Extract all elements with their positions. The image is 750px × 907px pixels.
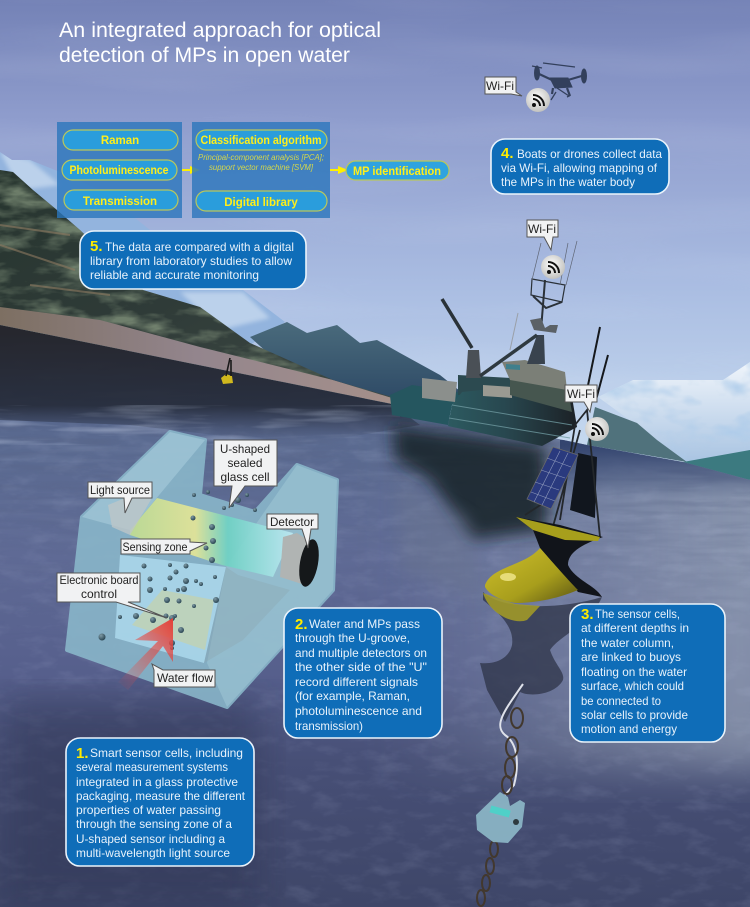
callout 3 (570, 604, 725, 742)
label: Electronic board control (57, 573, 167, 618)
pill: MP identification: MP identification (353, 166, 441, 178)
callout 5 (80, 231, 306, 289)
label: Wi-Fi drone (485, 77, 522, 96)
research boat (390, 241, 577, 446)
callout 1: 1. (76, 745, 89, 762)
boat: deck block (458, 375, 512, 395)
boat: main hull (448, 387, 577, 446)
callout 1: multi-wavelength light source (76, 846, 230, 860)
buoy: frame (525, 410, 600, 537)
distant buoy on the water (221, 358, 233, 384)
boat: wheelhouse upper (502, 360, 567, 390)
label: Electronic board control: Electronic board (60, 573, 138, 587)
pill: Digital library: Digital library (224, 197, 298, 209)
callout 3: be connected to (581, 694, 661, 708)
buoy: solar panel (527, 447, 578, 509)
background: left mountain and shore (0, 165, 400, 405)
cell: glass tube (130, 498, 293, 577)
callout 2: transmission) (295, 719, 363, 733)
boat: crane stay (480, 335, 537, 376)
callout 3: The sensor cells, (595, 607, 680, 621)
buoy: yellow float (485, 548, 578, 603)
boat: mast base (527, 335, 545, 364)
cell: water flow arrow (118, 618, 173, 690)
buoy: dark back panel (570, 453, 597, 518)
boat: radar frame (531, 241, 577, 330)
buoy (480, 327, 608, 722)
callout 2: (for example, Raman, (295, 689, 410, 703)
callout 2: record different signals (295, 675, 418, 689)
buoy: masts (585, 327, 608, 400)
callout 4: 4. (501, 145, 514, 162)
pill: Classification algorithm: Classification algorithm (200, 135, 322, 147)
label: Water flow (152, 664, 215, 687)
chain links (477, 708, 523, 906)
cell: outer translucent block (67, 432, 337, 707)
PCA and SVM note: Principal-component analysis [PCA]; (198, 153, 324, 162)
title (59, 19, 381, 67)
callout 5: The data are compared with a digital (105, 240, 294, 254)
callout 4 (491, 139, 669, 194)
PCA and SVM note (198, 153, 324, 172)
callout 1: integrated in a glass protective (76, 775, 238, 789)
callout 5: reliable and accurate monitoring (90, 268, 259, 282)
label: Detector (267, 514, 318, 548)
label: U-shaped sealed glass cell: sealed (228, 456, 262, 470)
arrow: signals to classification (182, 166, 200, 174)
label: U-shaped sealed glass cell: glass cell (220, 470, 270, 484)
label: Sensing zone: Sensing zone (122, 540, 188, 554)
callout 3: solar cells to provide (581, 708, 688, 722)
icon: Wi-Fi drone (526, 88, 550, 112)
callout 4: via Wi-Fi, allowing mapping of (501, 161, 658, 175)
callout 3: 3. (581, 606, 594, 623)
PCA and SVM note: support vector machine [SVM] (209, 163, 314, 172)
callout 1: Smart sensor cells, including (90, 746, 243, 760)
callout 2: through the U-groove, (295, 631, 410, 645)
label: Wi-Fi boat (527, 220, 558, 250)
background: sky (0, 0, 750, 480)
label: Water flow: Water flow (157, 671, 213, 685)
boat: aft hull (390, 385, 462, 425)
pill: Photoluminescence: Photoluminescence (70, 165, 168, 177)
background: water (0, 300, 750, 907)
label: Light source: Light source (90, 483, 150, 497)
label: Electronic board control: control (81, 587, 117, 601)
boat: deck boxes (422, 378, 457, 402)
drone (532, 63, 586, 100)
callout 4: Boats or drones collect data (517, 147, 662, 161)
buoy: black body (516, 517, 603, 597)
cell: left arm top face (82, 432, 205, 530)
boat: wheelhouse lower (510, 375, 572, 412)
callout 4: the MPs in the water body (501, 175, 635, 189)
callout 3: are linked to buoys (581, 650, 681, 664)
label: Wi-Fi boat: Wi-Fi (528, 222, 556, 236)
icon: Wi-Fi buoy (585, 417, 609, 441)
callout 3: at different depths in (581, 621, 689, 635)
cell: electronic board (132, 590, 214, 650)
callout 2: and multiple detectors on (295, 646, 427, 660)
cell: detector (280, 533, 322, 588)
pill: Transmission: Transmission (83, 196, 157, 208)
label: Wi-Fi buoy: Wi-Fi (567, 387, 595, 401)
boat: deck house (483, 385, 512, 398)
callout 5: library from laboratory studies to allow (90, 254, 292, 268)
label: Detector: Detector (270, 515, 314, 529)
callout 3: motion and energy (581, 722, 677, 736)
callout 3: the water column, (581, 636, 674, 650)
submerged sensor on chain (476, 684, 525, 906)
icon: Wi-Fi boat (541, 255, 565, 279)
callout 2: 2. (295, 616, 308, 633)
sensor cell illustration (67, 432, 337, 707)
pill: MP identification (346, 161, 449, 180)
boat: windows (506, 364, 520, 370)
callout 1: properties of water passing (76, 803, 221, 817)
callout 1: through the sensing zone of a (76, 817, 232, 831)
white cable (500, 684, 523, 795)
buoy: reflection (480, 592, 602, 722)
title: An integrated approach for optical (59, 19, 381, 42)
pill: Raman: Raman (101, 135, 139, 147)
label: U-shaped sealed glass cell (214, 440, 277, 508)
small sensor block (476, 792, 525, 843)
boat: aerial (510, 313, 518, 350)
callout 2 (284, 608, 442, 738)
cell: microplastic beads (98, 490, 257, 650)
boat: crane arm (442, 299, 472, 348)
arrow: classification to identification (330, 166, 348, 174)
callout 1: several measurement systems (76, 760, 228, 774)
label: Wi-Fi buoy (565, 385, 597, 412)
callout 2: photoluminescence and (295, 704, 422, 718)
callout 1: U-shaped sensor including a (76, 832, 225, 846)
callout 3: surface, which could (581, 679, 684, 693)
callout 1: packaging, measure the different (76, 789, 246, 803)
cell: front opening (115, 555, 226, 663)
cell: light source cylinder (108, 498, 152, 535)
callout 1 (66, 738, 254, 866)
boat: radar unit (530, 318, 558, 333)
buoy: highlight (500, 573, 516, 581)
callout 5: 5. (90, 238, 103, 255)
panel: analysis (192, 122, 330, 218)
callout 2: Water and MPs pass (309, 617, 420, 631)
cell: right arm face (207, 465, 337, 707)
title: detection of MPs in open water (59, 44, 350, 67)
panel: optical signals (57, 122, 182, 218)
callout 3: floating on the water (581, 665, 687, 679)
buoy: top plate (516, 517, 600, 541)
callout 2: the other side of the "U" (295, 660, 427, 674)
buoy: yellow reflection (483, 593, 540, 621)
boat: crane post (466, 350, 481, 378)
label: Light source (88, 482, 152, 513)
label: U-shaped sealed glass cell: U-shaped (220, 442, 270, 456)
background: snowy mountains on the horizon (0, 152, 750, 480)
cell: right inner wall (204, 567, 290, 663)
label: Wi-Fi drone: Wi-Fi (486, 79, 514, 93)
